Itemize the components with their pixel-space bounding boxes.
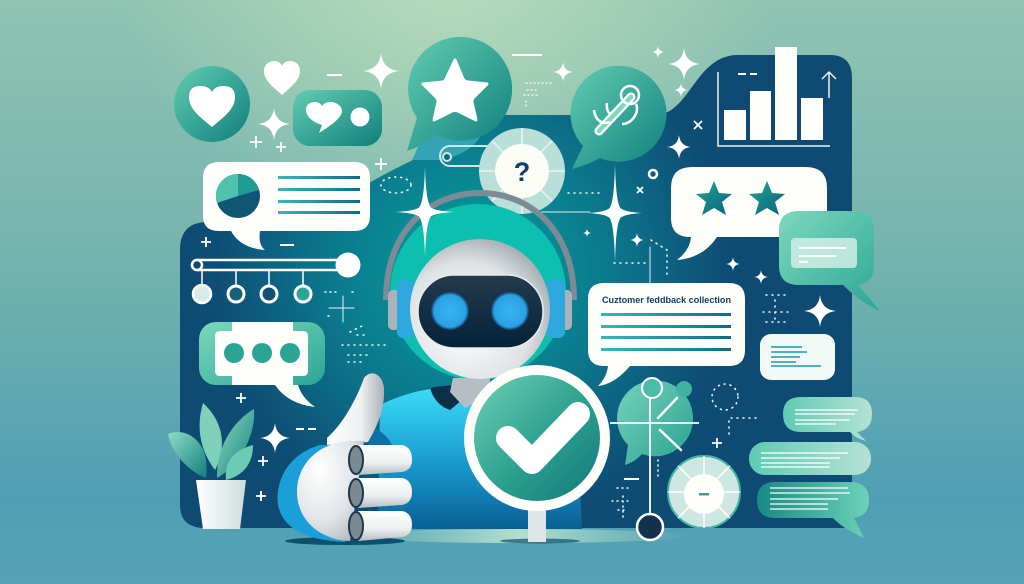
thumb [327, 373, 384, 445]
pendulum [637, 514, 663, 540]
body [378, 387, 582, 529]
star 2 [749, 181, 785, 215]
plant [168, 403, 254, 529]
icon: question wheel with tag: ? [514, 157, 530, 187]
sign stand [528, 508, 546, 542]
timeline diagram [192, 252, 360, 303]
dotted decorations [325, 83, 788, 520]
icon: three-dot bubble [199, 322, 325, 407]
feedback heading: Cuztomer feddback collection [602, 295, 731, 306]
icon: heart bubble [174, 66, 250, 142]
clock bubble [610, 378, 699, 540]
palm [297, 440, 364, 541]
teal dome [390, 204, 566, 380]
callout: pie chart bubble [203, 162, 370, 250]
star 1 [696, 181, 732, 215]
white ring [464, 365, 610, 511]
wrist [365, 425, 392, 450]
floor highlight [285, 529, 690, 545]
thumbs-up hand [277, 373, 412, 542]
headband [386, 193, 574, 300]
bar chart [718, 47, 836, 146]
pie chart [216, 174, 260, 218]
finger 1 [349, 445, 412, 475]
visor [418, 275, 543, 348]
plus and dash marks [201, 55, 757, 501]
callout: stars bubble [671, 167, 827, 260]
bubble: feedback message 2 [749, 442, 871, 475]
swoosh under star bubble [412, 132, 482, 160]
left earpiece [388, 280, 414, 338]
icon: star bubble [407, 37, 512, 151]
cuff [277, 445, 345, 542]
arrow [822, 72, 836, 98]
bubble: feedback message 1 [783, 397, 872, 441]
icon: question wheel with tag [440, 128, 590, 214]
finger 3 [349, 511, 412, 541]
icon: wrench bubble [571, 66, 667, 169]
feedback lines [601, 313, 731, 351]
sparkles [258, 46, 836, 453]
right earpiece [546, 280, 572, 338]
bubble: feedback message 3 [757, 482, 869, 538]
dial [668, 456, 740, 528]
check mark [508, 414, 578, 462]
callout: customer feedback bubble [588, 283, 745, 386]
text lines [278, 176, 360, 214]
small note card [760, 334, 835, 380]
green disc [474, 375, 600, 501]
ring marker [649, 170, 657, 178]
icon: green note bubble [779, 211, 880, 311]
pot [196, 480, 246, 529]
panel: dark blue backdrop [180, 55, 852, 528]
check sign [464, 365, 610, 542]
head [410, 239, 550, 379]
collar [430, 385, 480, 410]
icon: heart and dot pill bubble [293, 90, 382, 146]
finger 2 [349, 478, 412, 508]
robot [378, 193, 582, 529]
eye right [491, 292, 529, 330]
neck [450, 378, 490, 408]
icon: floating heart [264, 61, 300, 95]
eye left [431, 292, 469, 330]
